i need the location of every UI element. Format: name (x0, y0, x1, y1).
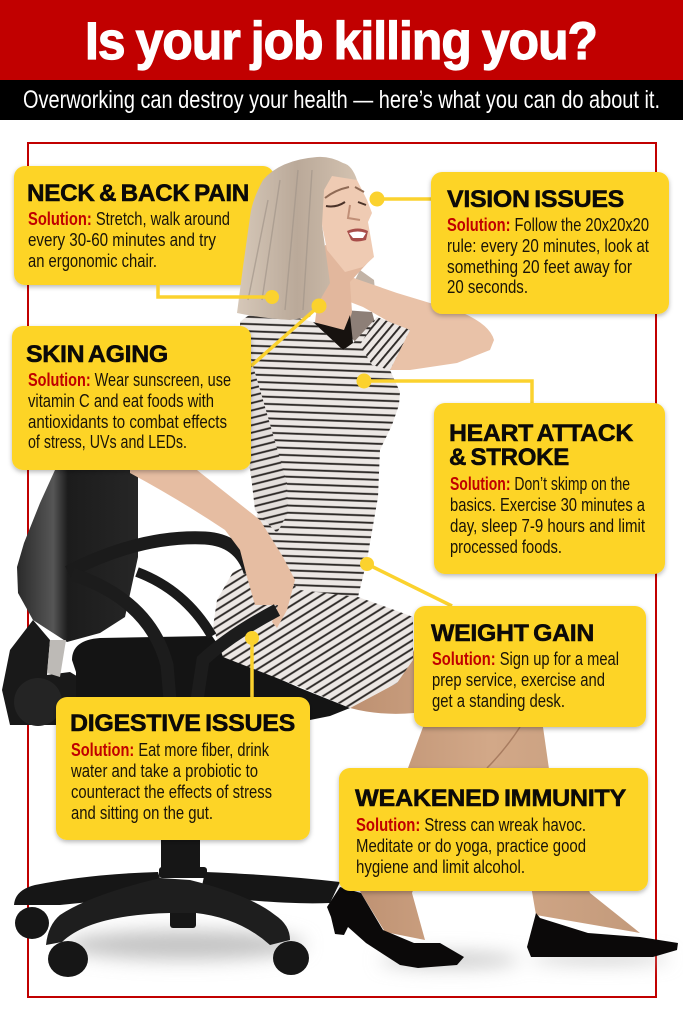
armrest (68, 538, 250, 572)
title banner (0, 0, 683, 80)
text: weight solution: get a standing desk. (432, 691, 565, 711)
heading: neck and back pain: NECK & BACK PAIN (27, 180, 249, 207)
connector: heart attack and stroke (356, 374, 532, 403)
text: digestive solution: and sitting on the gut. (71, 803, 213, 823)
armrest strut (72, 574, 277, 700)
subtitle bar (0, 80, 683, 120)
panel: weakened immunity (339, 768, 648, 891)
text: neck and back solution: Solution: Stretch, walk around (28, 209, 230, 229)
text: immunity solution: hygiene and limit alcohol. (356, 857, 525, 877)
heading: heart attack and stroke: HEART ATTACK (449, 420, 634, 447)
text: digestive solution: water and take a probiotic to (70, 761, 258, 781)
heading: digestive issues: DIGESTIVE ISSUES (70, 710, 295, 737)
neckline (313, 315, 353, 350)
heading: heart attack and stroke: & STROKE (449, 444, 569, 471)
sleeve on raised arm (360, 317, 410, 370)
text: digestive solution: counteract the effects of stress (71, 782, 272, 802)
panel: neck and back pain (14, 166, 274, 285)
text: immunity solution: Meditate or do yoga, practice good (356, 836, 586, 856)
text: immunity solution: Solution: Stress can wreak havoc. (356, 815, 586, 835)
chair mechanism (2, 620, 100, 726)
text: neck and back solution: every 30-60 minutes and try (28, 230, 216, 250)
raised arm (345, 276, 494, 370)
lowered arm and hand (130, 470, 295, 628)
legs (340, 650, 640, 940)
red frame (28, 143, 656, 997)
woman (68, 157, 678, 968)
text: skin solution: Solution: Wear sunscreen, use (28, 370, 231, 390)
text: vision solution: something 20 feet away for (447, 257, 632, 277)
heading: weakened immunity: WEAKENED IMMUNITY (355, 785, 626, 812)
panel: skin aging (12, 326, 251, 470)
chair arm behind (137, 572, 212, 636)
text: skin solution: antioxidants to combat effects (28, 412, 227, 432)
dress torso (240, 310, 410, 620)
panel: weight gain (414, 606, 646, 727)
neck (315, 245, 372, 345)
sleeve on lowered arm (240, 322, 288, 533)
panel: vision issues (431, 172, 669, 314)
text: heart solution (450, 474, 646, 557)
connector: neck and back pain (158, 285, 279, 304)
text: skin solution: of stress, UVs and LEDs. (28, 432, 187, 452)
shoes (327, 887, 678, 968)
hair back (340, 310, 378, 345)
text: heart solution: basics. Exercise 30 minutes a (450, 495, 646, 515)
connector: digestive issues (245, 631, 259, 697)
text: weight solution: Solution: Sign up for a meal (432, 649, 619, 669)
connector: vision issues (370, 192, 431, 206)
text: vision solution: rule: every 20 minutes, look at (447, 236, 649, 256)
chair seat (72, 636, 350, 722)
face (322, 173, 374, 272)
floor shadows (65, 930, 670, 967)
panel: heart attack and stroke (434, 403, 665, 574)
text: heart solution: processed foods. (450, 537, 562, 557)
text: weight solution: prep service, exercise and (432, 670, 605, 690)
text: skin solution (28, 370, 231, 452)
heading: weight gain: WEIGHT GAIN (431, 620, 594, 647)
text: heart solution: day, sleep 7-9 hours and limit (450, 516, 645, 536)
hair (237, 157, 357, 320)
text: digestive solution (70, 740, 272, 823)
text: skin solution: vitamin C and eat foods with (28, 391, 214, 411)
chair column and base (14, 838, 340, 977)
panel: digestive issues (56, 697, 310, 840)
dress skirt (213, 560, 413, 708)
text: neck and back solution: an ergonomic chair. (28, 251, 157, 271)
text: vision solution (447, 215, 649, 297)
text: digestive solution: Solution: Eat more fiber, drink (71, 740, 270, 760)
text: immunity solution (356, 815, 586, 877)
heading: vision issues: VISION ISSUES (447, 186, 624, 213)
chair backrest (17, 470, 138, 642)
office chair (2, 470, 350, 977)
connector: weight gain (360, 557, 452, 606)
connector: skin aging (251, 298, 326, 366)
text: neck and back solution (28, 209, 230, 271)
heading: skin aging: SKIN AGING (26, 341, 168, 368)
title banner: Is your job killing you? (85, 12, 597, 71)
text: weight solution (432, 649, 619, 711)
text: vision solution: Solution: Follow the 20x20x20 (447, 215, 649, 235)
text: vision solution: 20 seconds. (447, 277, 528, 297)
text: heart solution: Solution: Don’t skimp on the (450, 474, 630, 494)
heading: heart attack and stroke (449, 420, 634, 471)
